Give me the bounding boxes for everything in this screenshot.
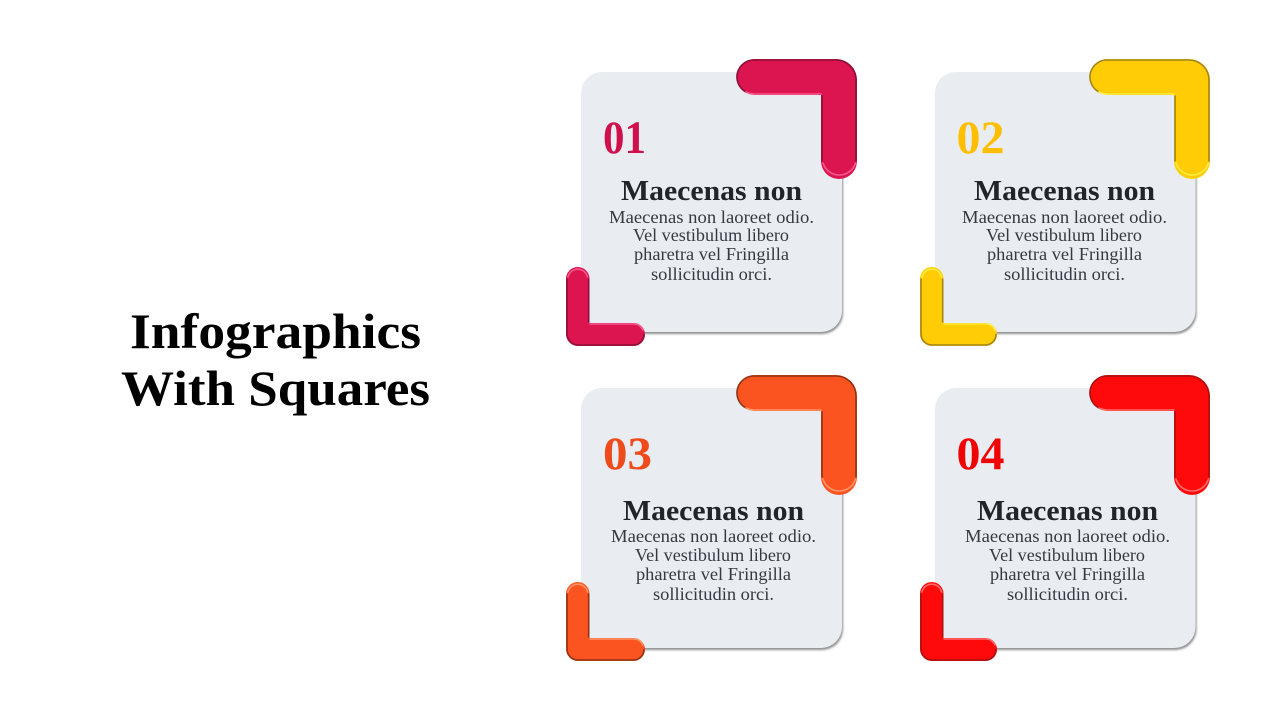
panel: card 02 bbox=[920, 59, 1210, 346]
body text 04: pharetra vel Fringilla bbox=[990, 564, 1145, 584]
body text 02: sollicitudin orci. bbox=[1004, 264, 1125, 284]
body text 04 bbox=[965, 526, 1170, 604]
panel: card 01 bbox=[566, 59, 857, 346]
card background 02 bbox=[935, 72, 1196, 334]
icon: bottom left bracket 02 bbox=[920, 267, 997, 346]
heading 03: Maecenas non bbox=[623, 496, 804, 527]
heading 01: Maecenas non bbox=[621, 176, 802, 207]
number 01: 01 bbox=[603, 112, 646, 164]
panel: card 04 bbox=[920, 375, 1210, 661]
body text 03: pharetra vel Fringilla bbox=[636, 564, 791, 584]
body text 03: Maecenas non laoreet odio. bbox=[611, 526, 816, 546]
body text 03 bbox=[611, 526, 816, 604]
body text 01: Vel vestibulum libero bbox=[633, 225, 789, 245]
heading 02: Maecenas non bbox=[974, 176, 1155, 207]
card background 01 bbox=[581, 72, 843, 334]
number 04: 04 bbox=[956, 428, 1004, 480]
body text 01: pharetra vel Fringilla bbox=[634, 244, 789, 264]
body text 03: sollicitudin orci. bbox=[653, 584, 774, 604]
title: With Squares bbox=[121, 360, 430, 416]
title: Infographics bbox=[130, 303, 421, 359]
number 02: 02 bbox=[956, 112, 1004, 164]
icon: bottom left bracket 03 bbox=[566, 582, 645, 661]
card background 04 bbox=[935, 388, 1196, 650]
heading 04: Maecenas non bbox=[977, 496, 1158, 527]
icon: top right bracket 01 bbox=[737, 59, 857, 179]
body text 02: Maecenas non laoreet odio. bbox=[962, 207, 1167, 227]
icon: bottom left bracket 04 bbox=[920, 582, 997, 661]
body text 01: sollicitudin orci. bbox=[651, 264, 772, 284]
body text 01 bbox=[609, 207, 814, 284]
body text 02: pharetra vel Fringilla bbox=[987, 244, 1142, 264]
card background 03 bbox=[581, 388, 843, 650]
title bbox=[121, 303, 430, 416]
icon: top right bracket 02 bbox=[1090, 59, 1210, 179]
icon: bottom left bracket 01 bbox=[566, 267, 645, 346]
body text 02: Vel vestibulum libero bbox=[986, 225, 1142, 245]
body text 04: Vel vestibulum libero bbox=[989, 545, 1145, 565]
icon: top right bracket 03 bbox=[737, 375, 857, 495]
body text 01: Maecenas non laoreet odio. bbox=[609, 207, 814, 227]
body text 03: Vel vestibulum libero bbox=[635, 545, 791, 565]
body text 02 bbox=[962, 207, 1167, 284]
icon: top right bracket 04 bbox=[1090, 375, 1210, 495]
body text 04: Maecenas non laoreet odio. bbox=[965, 526, 1170, 546]
panel: card 03 bbox=[566, 375, 857, 661]
number 03: 03 bbox=[603, 428, 652, 480]
body text 04: sollicitudin orci. bbox=[1007, 584, 1128, 604]
